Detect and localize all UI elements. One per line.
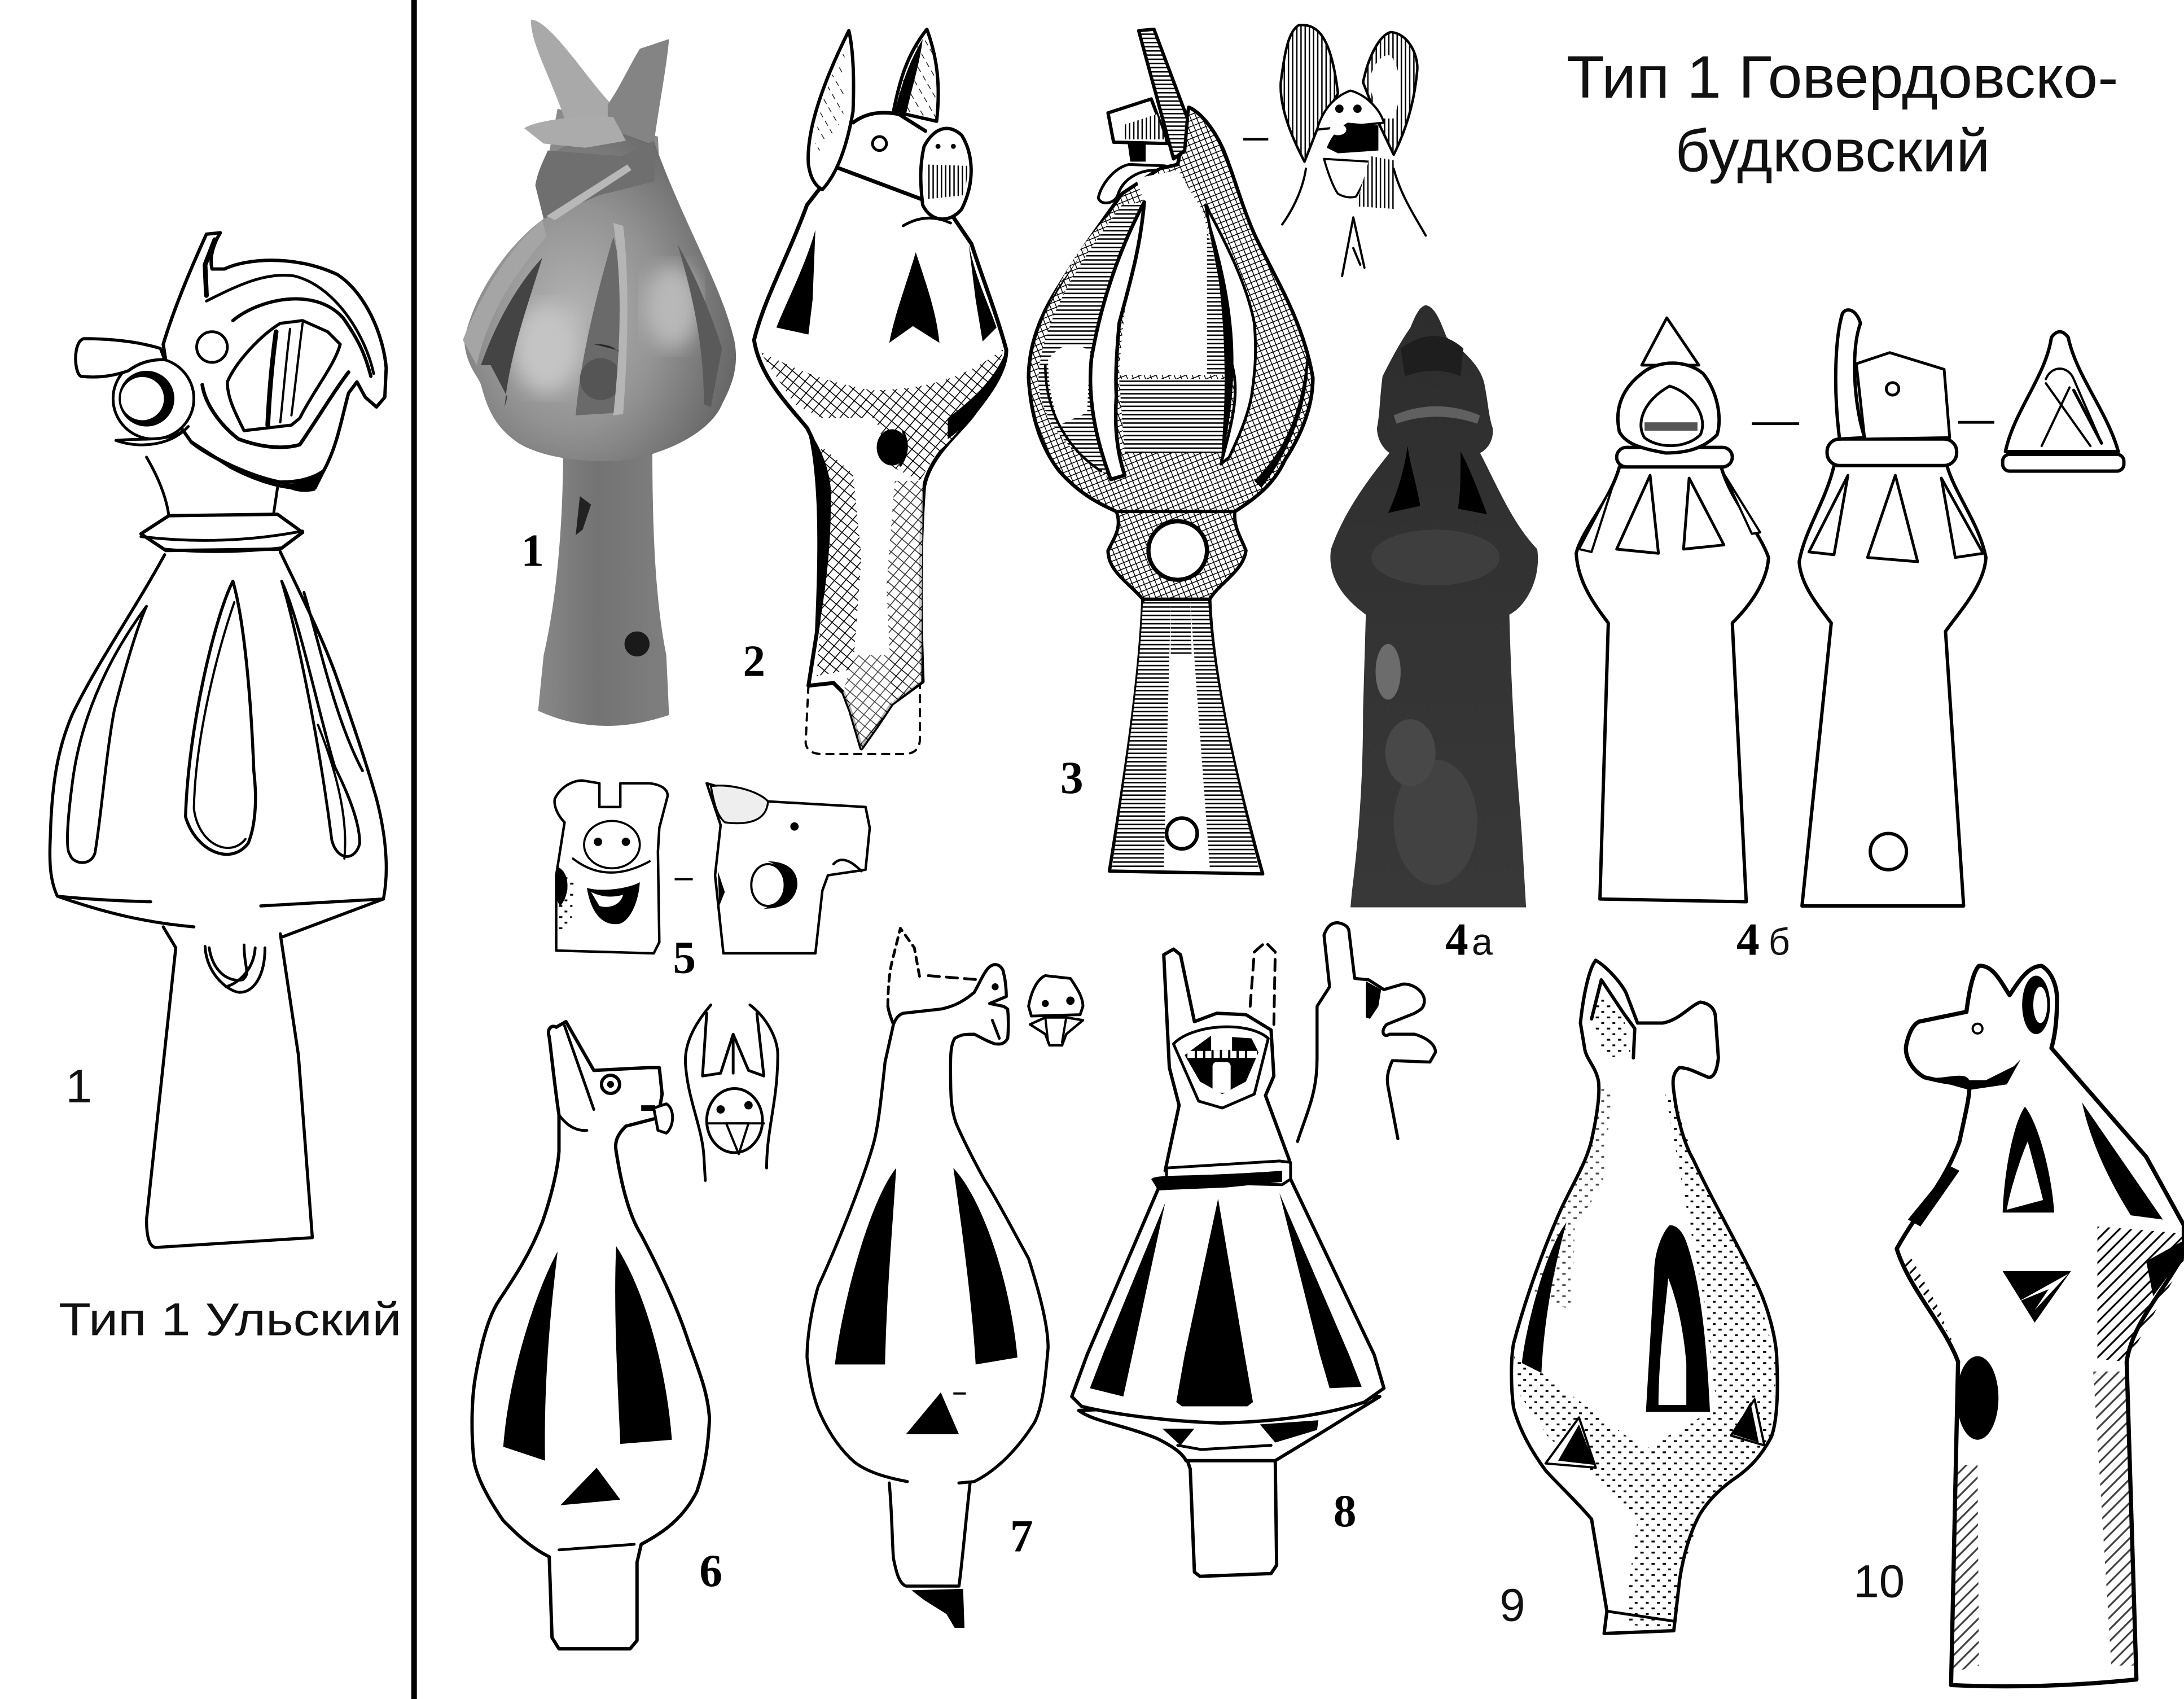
bell bbox=[1072, 1179, 1384, 1423]
tongue bbox=[1098, 164, 1165, 203]
hole bbox=[877, 430, 907, 466]
label: 5: 5 bbox=[673, 932, 696, 983]
tongue bbox=[654, 1104, 673, 1133]
label: 6: 6 bbox=[699, 1545, 722, 1596]
center light area bbox=[1119, 170, 1226, 375]
highlights bbox=[513, 304, 580, 393]
bulb bbox=[1029, 107, 1313, 511]
label: 2: 2 bbox=[743, 637, 765, 686]
bell body bbox=[50, 552, 386, 931]
bar bbox=[1752, 422, 1799, 425]
label: 3: 3 bbox=[1060, 752, 1084, 803]
label: 8: 8 bbox=[1334, 1485, 1357, 1536]
label: 10 bbox=[1834, 1547, 1924, 1608]
side view ear bbox=[1836, 310, 1865, 439]
label: 1: 1 bbox=[521, 525, 544, 576]
loop under body bbox=[205, 945, 265, 992]
left lobe bbox=[1038, 202, 1144, 479]
label: 10: 10 bbox=[1853, 1556, 1905, 1608]
stem bbox=[1109, 599, 1262, 874]
title line 2: будковский bbox=[1675, 118, 1990, 185]
back head view bbox=[2006, 332, 2119, 452]
label: 7: 7 bbox=[1010, 1510, 1033, 1561]
suffix a: а bbox=[1472, 921, 1493, 963]
ears bbox=[531, 20, 609, 125]
front view collar bbox=[1617, 448, 1733, 467]
body bbox=[1897, 966, 2184, 1687]
title: type 1 Goverdovsko-Budkovsky: Тип 1 Говердовско- bbox=[1567, 44, 2119, 111]
body ribs bbox=[613, 223, 628, 415]
lower flare bbox=[1079, 1396, 1380, 1461]
body bbox=[1511, 960, 1778, 1634]
collar ring bbox=[141, 514, 302, 550]
center slot bbox=[186, 581, 256, 855]
stipple bbox=[1514, 1091, 1777, 1631]
figure 6: line drawing with black slots bbox=[472, 1005, 778, 1649]
ear inner bbox=[1591, 980, 1635, 1058]
figure 9: stippled drawing bbox=[1511, 960, 1778, 1634]
triangular openings bbox=[889, 252, 940, 343]
figure 1: photo of bronze finial bbox=[463, 20, 736, 726]
bar bbox=[1958, 421, 1994, 424]
front head bbox=[685, 1005, 778, 1180]
ball ring bbox=[113, 358, 194, 439]
side view collar bbox=[1827, 439, 1957, 466]
collar ring bbox=[1166, 1161, 1291, 1185]
divider bbox=[411, 0, 417, 1699]
body bbox=[754, 167, 1006, 748]
neck fill bbox=[541, 109, 661, 195]
slits bbox=[1090, 202, 1144, 479]
bulb bbox=[464, 117, 736, 461]
figure 4b: line drawings bbox=[1576, 310, 2124, 906]
head bbox=[536, 141, 655, 219]
surface patches bbox=[1375, 644, 1401, 700]
side view head block bbox=[1856, 353, 1950, 439]
black bell triangles bbox=[1176, 1199, 1253, 1406]
label: 9: 9 bbox=[1499, 1580, 1525, 1631]
figure 3: hatched bronze drawing bbox=[1029, 25, 1426, 874]
broken base dashes bbox=[806, 686, 920, 754]
label: 1: 1 bbox=[65, 1059, 92, 1113]
head details bbox=[992, 983, 999, 990]
head block bbox=[1108, 99, 1168, 143]
neck bbox=[147, 457, 278, 516]
ring with hole bbox=[1108, 511, 1246, 599]
mouth bbox=[1173, 1027, 1268, 1108]
side view head bbox=[1280, 25, 1338, 161]
label: 4a: 4 bbox=[1445, 913, 1468, 965]
front view triangles bbox=[1617, 475, 1659, 553]
figure 7: line drawing with black slots bbox=[807, 929, 1083, 1628]
openings bbox=[2003, 1107, 2054, 1212]
head opening bbox=[227, 321, 340, 431]
handle bbox=[147, 927, 312, 1247]
left slot bbox=[68, 606, 147, 862]
stem shading bbox=[2093, 1372, 2134, 1666]
bird head bbox=[163, 233, 386, 488]
neck and ear bbox=[1164, 949, 1291, 1179]
figure 10: hatched clay finial bbox=[1897, 966, 2184, 1687]
body bbox=[472, 1022, 709, 1649]
figure 4a: dark photo bbox=[1330, 305, 1538, 907]
face bbox=[1029, 975, 1083, 1016]
side head bbox=[1297, 923, 1436, 1141]
eye boss bbox=[197, 332, 227, 362]
right arm shading bbox=[2082, 1102, 2163, 1220]
black slots bbox=[835, 1168, 896, 1364]
figure 2: hatched drawing bbox=[754, 29, 1006, 754]
ear inner lines bbox=[559, 1026, 594, 1131]
side view triangles bbox=[1867, 475, 1918, 562]
snout with teeth bbox=[921, 129, 971, 219]
front view head bbox=[1642, 318, 1699, 365]
side view hole bbox=[1870, 834, 1906, 870]
broken base bbox=[911, 1589, 964, 1628]
openings bbox=[1388, 446, 1420, 513]
stem bbox=[538, 446, 669, 726]
left panel: Ulsky finial bbox=[50, 233, 386, 1247]
stem bbox=[1186, 1456, 1277, 1577]
front head bbox=[555, 781, 668, 953]
ears bbox=[808, 30, 853, 190]
dashed ear bbox=[888, 929, 920, 1006]
figure 5: small heads bbox=[555, 781, 870, 953]
right slot bbox=[282, 581, 359, 856]
stem hatching bbox=[817, 446, 861, 676]
suffix b: б bbox=[1769, 921, 1790, 963]
label background bbox=[1834, 1547, 1924, 1607]
lower jaw lines bbox=[202, 372, 349, 447]
label: type 1 Ulsky: Тип 1 Ульский bbox=[59, 1294, 401, 1346]
black slots bbox=[503, 1251, 558, 1461]
muzzle bbox=[524, 116, 626, 148]
head stick bbox=[1139, 29, 1187, 159]
bulge hatching bbox=[760, 348, 1003, 481]
side view body bbox=[1799, 466, 1986, 906]
front head bbox=[1029, 975, 1083, 1045]
ear hole bbox=[2022, 975, 2050, 1034]
figure 8: line drawing with black triangles bbox=[1072, 923, 1436, 1577]
head top bbox=[853, 113, 926, 131]
label: 4b: 4 bbox=[1736, 913, 1760, 965]
front view body bbox=[1576, 467, 1769, 902]
silhouette bbox=[1330, 305, 1538, 907]
openings bbox=[1522, 1223, 1567, 1373]
body bbox=[807, 966, 1048, 1586]
flare rim bbox=[1178, 1446, 1271, 1450]
side head bbox=[707, 783, 870, 953]
openings bbox=[481, 258, 542, 407]
head outline arcs bbox=[685, 1005, 711, 1180]
left snout bbox=[76, 339, 165, 377]
